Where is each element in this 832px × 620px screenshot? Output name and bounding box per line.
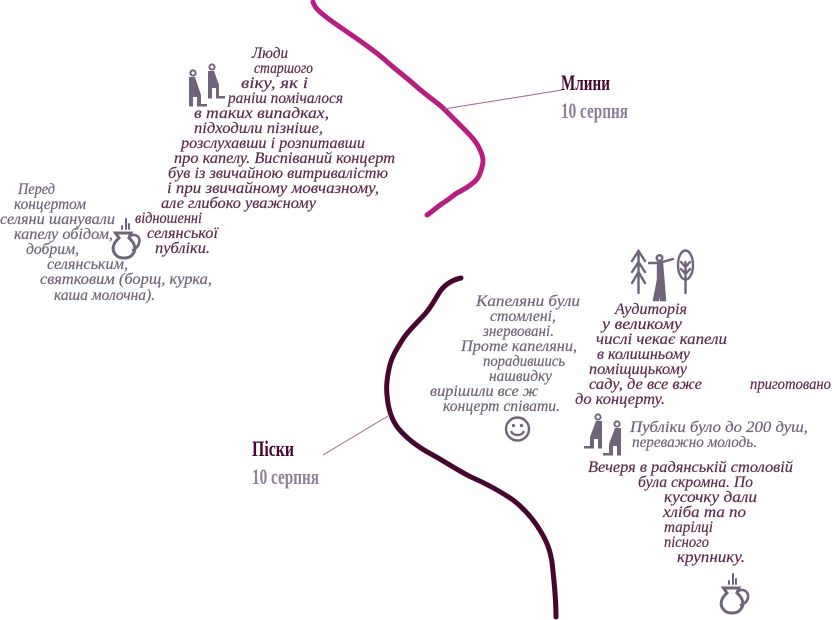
place label: Pisky: 10 серпня	[252, 464, 319, 489]
place label: Mlyny: 10 серпня	[561, 98, 628, 123]
place label: Pisky	[252, 436, 319, 489]
text block: older people: підходили пізніше,	[194, 120, 323, 137]
text block: supper: крупнику.	[677, 549, 745, 566]
text block: audience in garden: в колишньому	[597, 346, 690, 363]
text block: older people: публіки.	[155, 240, 210, 257]
text block: dinner before concert	[0, 181, 212, 304]
route curve: Pisky	[387, 278, 556, 617]
icon: trees and person	[632, 250, 693, 300]
text block: older people: віку, як і	[241, 75, 308, 92]
text block: audience in garden: Аудиторія	[614, 301, 687, 318]
route curve: Mlyny	[313, 2, 483, 215]
text block: audience in garden: до концерту.	[575, 391, 665, 408]
text block: audience in garden: поміщицькому	[589, 361, 687, 378]
text block: tired singers: Проте капеляни,	[460, 338, 577, 355]
text block: older people: Люди	[251, 45, 288, 62]
text block: audience in garden: числі чекає капели	[596, 331, 727, 348]
icon: two seated people, top	[189, 64, 225, 106]
text block: supper	[588, 459, 793, 566]
text block: audience in garden: у великому	[600, 316, 682, 333]
text block: tired singers: порадившись	[483, 353, 565, 370]
text block: tired singers: стомлені,	[490, 308, 556, 325]
icon: smiling face	[506, 418, 529, 440]
text block: supper: тарілці	[664, 519, 713, 536]
text block: older people: відношенні	[135, 210, 202, 227]
icon: two seated people, bottom	[584, 414, 621, 456]
text block: older people: в таких випадках,	[194, 105, 329, 122]
text block: supper: хліба та по	[662, 504, 746, 521]
text block: dinner before concert: концертом	[14, 196, 86, 213]
text block: older people: раніш помічалося	[227, 90, 343, 107]
text block: supper: кусочку дали	[664, 489, 757, 506]
text block: older people: селянської	[147, 225, 219, 242]
text block: dinner before concert: селянським,	[47, 256, 128, 273]
text block: dinner before concert: Перед	[17, 181, 55, 198]
text block: older people: був із звичайною витривалістю	[168, 165, 388, 182]
text block: older people: старшого	[254, 60, 313, 77]
leader line: Mlyny	[444, 90, 562, 109]
text block: tired singers: концерт співати.	[443, 398, 560, 415]
text block: tired singers: нашвидку	[489, 368, 552, 385]
text block: tired singers: вирішили все ж	[430, 383, 539, 400]
text block: supper: була скромна. По	[638, 474, 753, 491]
text block: tired singers: знервовані.	[482, 323, 554, 340]
text block: dinner before concert: святковим (борщ, курка,	[40, 271, 212, 288]
text block: dinner before concert: селяни шанували	[0, 211, 115, 228]
text block: audience in garden	[575, 301, 831, 408]
icon: steaming jug, left	[113, 219, 139, 258]
text block: audience size: переважно молодь.	[632, 434, 757, 451]
text block: older people: і при звичайному мовчазному,	[167, 180, 379, 197]
text block: dinner before concert: добрим,	[26, 241, 79, 258]
text block: dinner before concert: каша молочна).	[54, 287, 155, 304]
text block: older people	[135, 45, 395, 257]
text block: older people: про капелу. Виспіваний концерт	[174, 150, 395, 167]
icon: steaming jug, bottom	[721, 574, 748, 613]
text block: audience size	[629, 419, 808, 451]
text block: audience size: Публіки було до 200 душ,	[629, 419, 808, 436]
text block: supper: пісного	[664, 534, 709, 551]
text block: older people: розслухавши і розпитавши	[180, 135, 365, 152]
text block: tired singers: Капеляни були	[475, 293, 580, 310]
place label: Mlyny: Млини	[561, 70, 610, 95]
text block: supper: Вечеря в радянській столовій	[588, 459, 793, 476]
text block: tired singers	[430, 293, 580, 415]
place label: Pisky: Піски	[252, 436, 294, 461]
leader line: Pisky	[323, 416, 388, 455]
text block: dinner before concert: капелу обідом,	[14, 226, 113, 243]
text block: older people: але глибоко уважному	[161, 195, 316, 212]
place label: Mlyny	[561, 70, 628, 123]
text block: audience in garden: саду, де все вже	[589, 376, 702, 393]
